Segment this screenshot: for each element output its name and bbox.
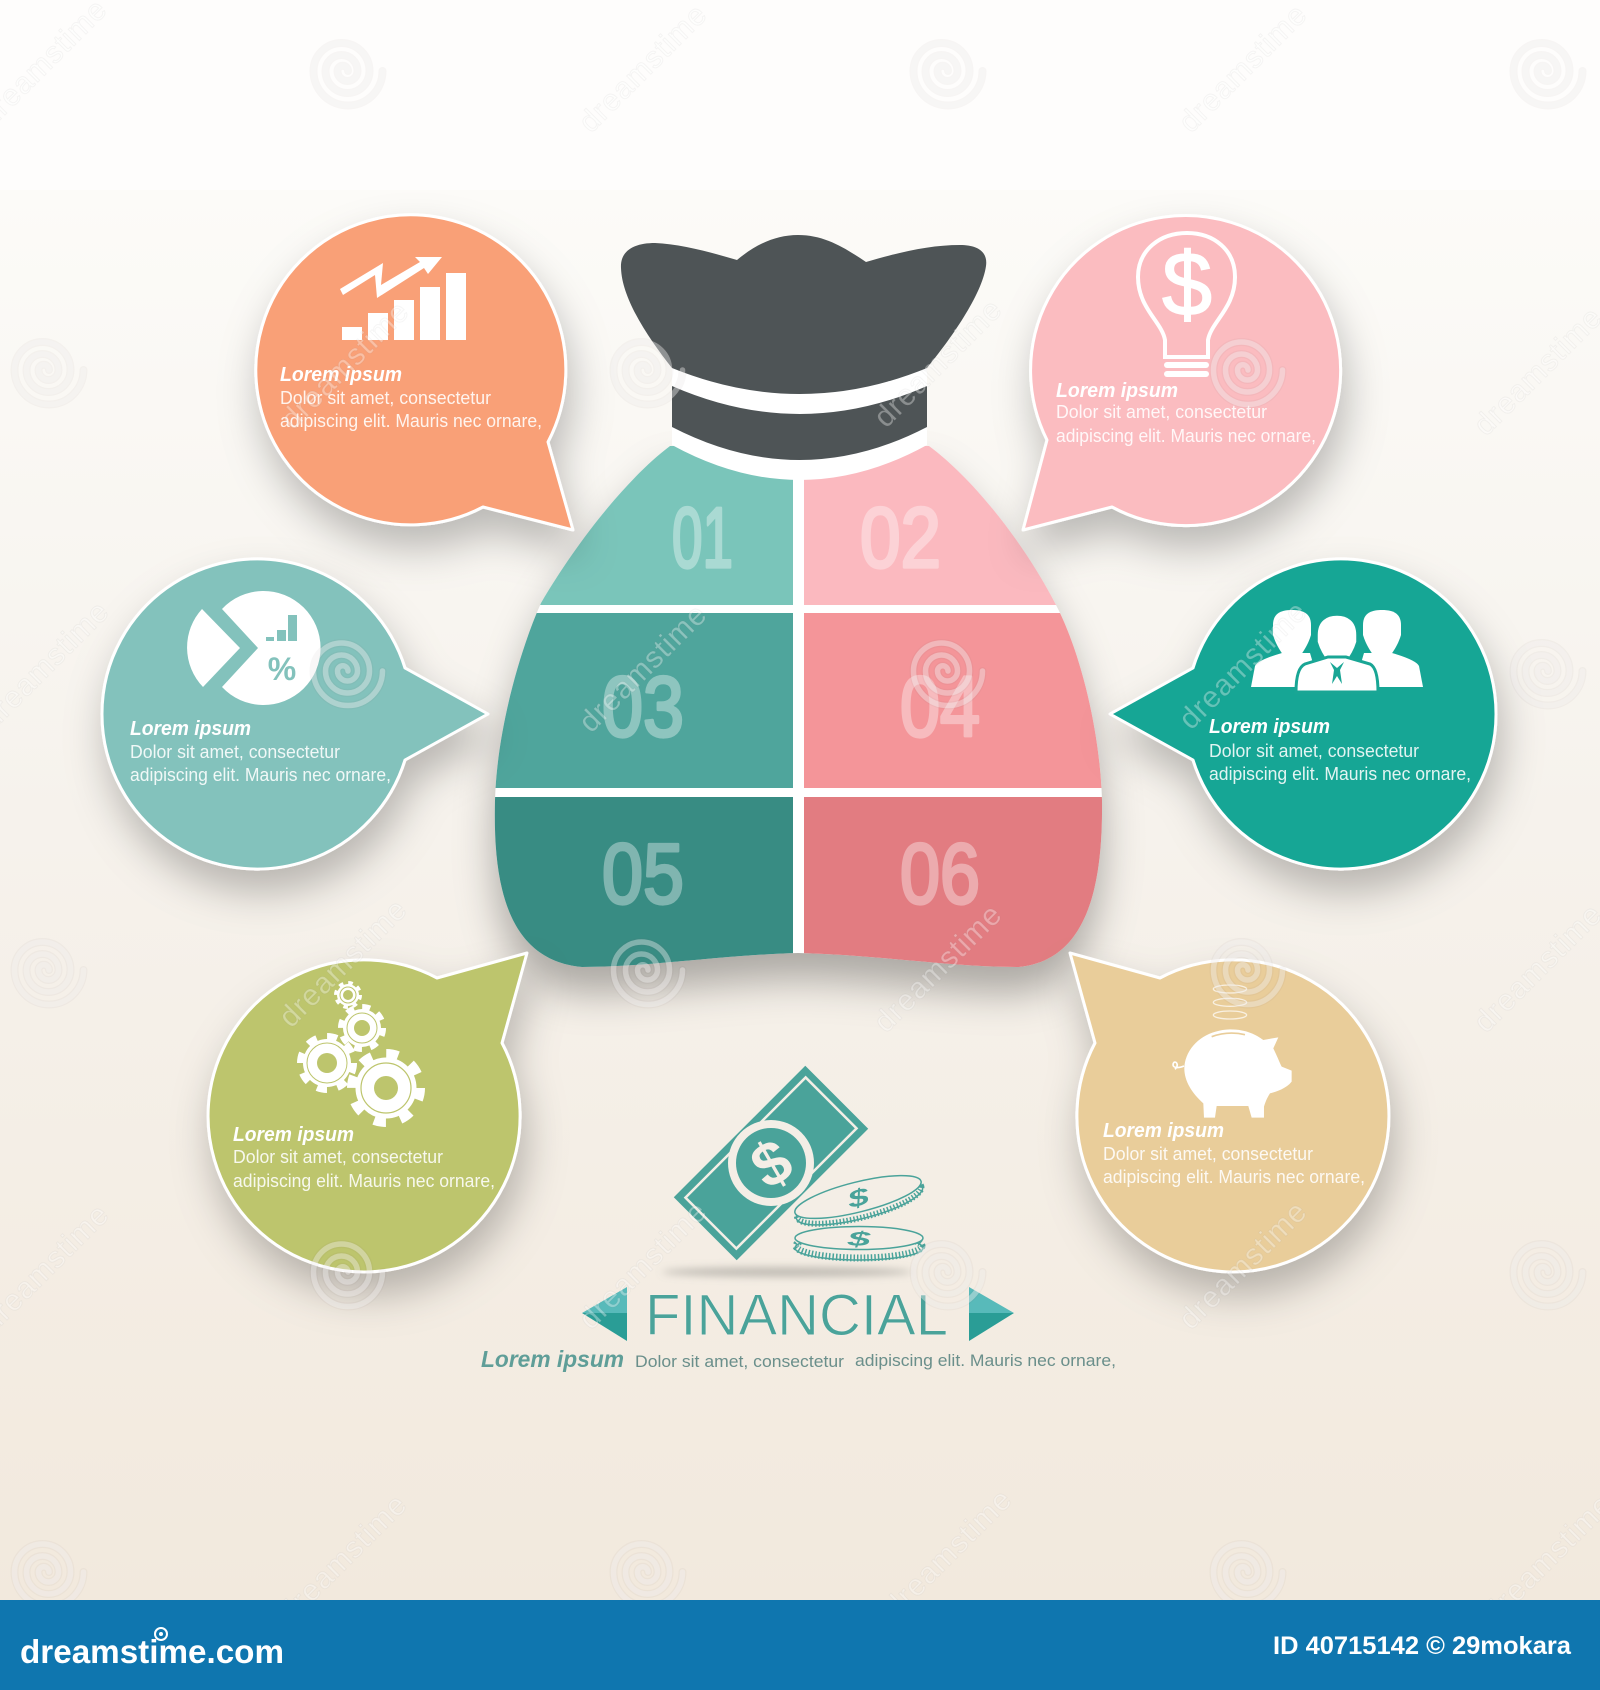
panel: tan bubble bbox=[1070, 953, 1389, 1272]
bag section 01: 01 bbox=[672, 491, 733, 586]
bag collar white band bbox=[672, 360, 927, 480]
bag section 04: 04 bbox=[900, 660, 980, 755]
lower coin: $ bbox=[846, 1228, 872, 1250]
bag section 03: 03 bbox=[602, 660, 684, 755]
text block: Dolor sit amet, consectetur bbox=[130, 742, 340, 762]
arrow: right bbox=[969, 1287, 1014, 1341]
upper coin bbox=[791, 1167, 926, 1234]
text block: Lorem ipsum bbox=[233, 1124, 354, 1146]
text block: adipiscing elit. Mauris nec ornare, bbox=[130, 765, 391, 785]
footer logo: dreamstime.com bbox=[20, 1633, 284, 1670]
text block bbox=[130, 718, 391, 785]
icon: dollar light bulb bbox=[1138, 233, 1235, 377]
icon: piggy bank with coins bbox=[1173, 985, 1292, 1118]
text block: Dolor sit amet, consectetur bbox=[1056, 402, 1267, 422]
watermark text: dreamstime bbox=[573, 1195, 714, 1336]
icon: pie chart with percent bbox=[187, 591, 321, 705]
icon: pie chart with percent: % bbox=[268, 651, 296, 687]
watermark text: dreamstime bbox=[868, 898, 1009, 1039]
bubble shape bbox=[1070, 953, 1389, 1272]
icon: three people bbox=[1251, 610, 1423, 692]
bag section 02 bbox=[804, 446, 1056, 605]
subtitle: Lorem ipsum bbox=[481, 1346, 624, 1372]
subtitle: adipiscing elit. Mauris nec ornare, bbox=[855, 1351, 1116, 1370]
watermark text: dreamstime bbox=[573, 598, 714, 739]
bag section 02: 02 bbox=[860, 491, 941, 586]
upper coin: $ bbox=[844, 1182, 872, 1214]
footer bar bbox=[0, 1600, 1600, 1690]
bubble shape bbox=[1110, 559, 1496, 869]
text block: adipiscing elit. Mauris nec ornare, bbox=[1209, 764, 1471, 784]
bag white underlay bbox=[495, 446, 1102, 967]
text block: Dolor sit amet, consectetur bbox=[280, 388, 491, 408]
bag top cap bbox=[621, 235, 986, 394]
watermark text: dreamstime bbox=[573, 0, 714, 139]
footer image id: ID 40715142 © 29mokara bbox=[1273, 1632, 1572, 1660]
money bag bbox=[480, 235, 1114, 993]
bag section 06 bbox=[804, 797, 1114, 977]
watermark text: dreamstime bbox=[273, 1488, 414, 1629]
bag section 01 bbox=[540, 446, 793, 605]
watermark text: dreamstime bbox=[275, 295, 416, 436]
watermark text: dreamstime bbox=[878, 1483, 1019, 1624]
watermark text: dreamstime bbox=[273, 893, 414, 1034]
text block bbox=[280, 364, 542, 431]
text block: Lorem ipsum bbox=[1056, 380, 1178, 402]
title: FINANCIAL bbox=[645, 1283, 948, 1348]
text block: Dolor sit amet, consectetur bbox=[1209, 741, 1419, 761]
text block: Dolor sit amet, consectetur bbox=[1103, 1144, 1313, 1164]
text block bbox=[1103, 1120, 1365, 1187]
bag section 06: 06 bbox=[900, 827, 980, 922]
text block: Lorem ipsum bbox=[1103, 1120, 1224, 1142]
icon: dollar light bulb: $ bbox=[1162, 235, 1212, 335]
text block: adipiscing elit. Mauris nec ornare, bbox=[280, 411, 542, 431]
bag section 05 bbox=[480, 797, 793, 977]
text block: adipiscing elit. Mauris nec ornare, bbox=[233, 1171, 495, 1191]
text block bbox=[1209, 716, 1471, 784]
bubble shape bbox=[1023, 216, 1341, 530]
icon: banknote and coins bbox=[662, 1066, 926, 1277]
watermark text: dreamstime bbox=[868, 293, 1009, 434]
ground shadow bbox=[662, 1267, 912, 1277]
bubble shape bbox=[208, 953, 527, 1272]
icon: gears bbox=[301, 983, 420, 1122]
subtitle: Dolor sit amet, consectetur bbox=[635, 1352, 844, 1371]
subtitle bbox=[481, 1346, 1116, 1372]
text block: Lorem ipsum bbox=[1209, 716, 1330, 738]
text block: adipiscing elit. Mauris nec ornare, bbox=[1103, 1167, 1365, 1187]
watermark text: dreamstime bbox=[1173, 1195, 1314, 1336]
bubble shape bbox=[256, 215, 573, 530]
arrow: left bbox=[582, 1287, 627, 1341]
bag shadow bbox=[495, 472, 1102, 993]
banknote: $ bbox=[740, 1126, 804, 1203]
text block: Dolor sit amet, consectetur bbox=[233, 1147, 443, 1167]
text block: Lorem ipsum bbox=[130, 718, 251, 740]
bubble shape bbox=[102, 559, 488, 869]
bag section 03 bbox=[480, 613, 793, 788]
watermark text: dreamstime bbox=[1173, 595, 1314, 736]
text block bbox=[233, 1124, 495, 1191]
panel: light teal bubble bbox=[102, 559, 488, 869]
text block bbox=[1056, 380, 1316, 446]
bag tie band bbox=[672, 386, 927, 460]
text block: adipiscing elit. Mauris nec ornare, bbox=[1056, 426, 1316, 446]
banknote bbox=[674, 1066, 868, 1260]
panel: teal bubble bbox=[1110, 559, 1496, 869]
lower coin bbox=[795, 1226, 923, 1260]
bag section 04 bbox=[804, 613, 1114, 788]
panel: pink bubble bbox=[1023, 216, 1341, 530]
icon: rising bar chart bbox=[340, 257, 466, 340]
watermark text: dreamstime bbox=[1173, 0, 1314, 139]
text block: Lorem ipsum bbox=[280, 364, 402, 386]
panel: orange bubble bbox=[256, 215, 573, 530]
panel: olive bubble bbox=[208, 953, 527, 1272]
bag section 05: 05 bbox=[602, 827, 684, 922]
